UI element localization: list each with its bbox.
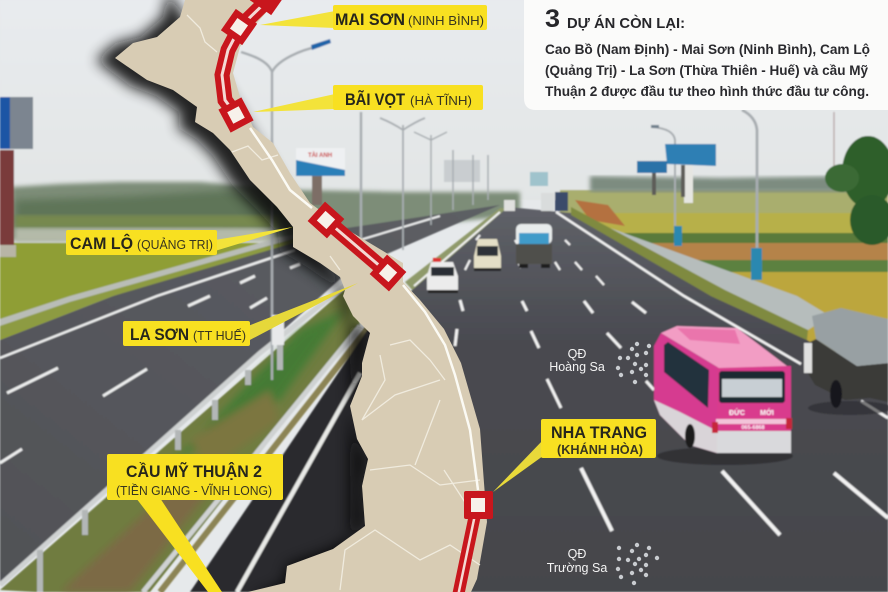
central median with vegetation <box>0 283 360 592</box>
label: Bãi Vọt: (HÀ TĨNH) <box>410 93 472 108</box>
panel body text <box>545 41 870 99</box>
dots: Trường Sa <box>616 543 659 585</box>
sky <box>0 0 888 200</box>
label: Cầu Mỹ Thuận 2: (TIỀN GIANG - VĨNH LONG) <box>116 483 272 498</box>
label: Bãi Vọt <box>253 85 483 112</box>
left carriageway <box>0 205 500 585</box>
white van <box>474 239 501 271</box>
light pole bases <box>674 226 762 280</box>
middle billboard <box>296 148 345 205</box>
left billboard <box>0 97 33 257</box>
provincial borders <box>187 15 480 590</box>
pink bus <box>654 326 793 465</box>
map shadow <box>96 0 370 592</box>
tree <box>825 136 888 245</box>
map of Vietnam <box>115 0 487 592</box>
label: Cầu Mỹ Thuận 2: CẦU MỸ THUẬN 2 <box>126 461 262 481</box>
panel heading <box>545 5 685 33</box>
centre carriageway <box>190 326 400 592</box>
national highway lines <box>250 128 478 490</box>
left road guardrail <box>0 233 300 326</box>
node: La Sơn <box>370 255 406 291</box>
node: Cam Lộ <box>308 202 344 238</box>
route: Cam Lộ to La Sơn <box>308 202 406 291</box>
label: Cam Lộ: (QUẢNG TRỊ) <box>137 237 213 252</box>
label: Trường Sa islands: QĐ <box>568 547 586 561</box>
node: Bãi Vọt <box>218 97 254 133</box>
label: Hoàng Sa islands: QĐ <box>568 347 586 361</box>
middle billboard: TÀI ANH <box>308 152 332 159</box>
label: La Sơn: LA SƠN <box>130 325 189 344</box>
node: Nha Trang <box>464 491 493 519</box>
tanker truck <box>516 224 552 268</box>
distant traffic <box>504 172 568 211</box>
label: Nha Trang: (KHÁNH HÒA) <box>557 442 643 457</box>
left road markings <box>0 216 440 463</box>
label: Cam Lộ <box>66 227 293 255</box>
panel heading: DỰ ÁN CÒN LẠI: <box>567 14 685 32</box>
label: Trường Sa islands <box>547 543 659 585</box>
panel body text: (Quảng Trị) - La Sơn (Thừa Thiên - Huế) và cầu Mỹ <box>545 62 868 78</box>
dots: Hoàng Sa <box>616 342 651 384</box>
street lights <box>241 46 834 380</box>
panel body text: Cao Bồ (Nam Định) - Mai Sơn (Ninh Bình), Cam Lộ <box>545 41 870 57</box>
node: Mai Sơn <box>221 9 257 45</box>
label: Nha Trang: NHA TRANG <box>551 423 647 442</box>
label: Mai Sơn: (NINH BÌNH) <box>408 13 484 28</box>
panel heading: 3 <box>545 5 560 33</box>
label: La Sơn: (TT HUẾ) <box>193 328 246 343</box>
right blue signs <box>637 144 716 203</box>
label: Bãi Vọt: BÃI VỌT <box>345 89 406 109</box>
label: Cầu Mỹ Thuận 2 <box>107 454 283 592</box>
label: La Sơn <box>123 283 358 346</box>
label: Nha Trang <box>493 419 656 492</box>
right roadside strip and guardrail <box>571 207 808 340</box>
label: Trường Sa islands: Trường Sa <box>547 561 607 575</box>
pink bus: ĐỨC <box>729 408 745 417</box>
panel: 3 remaining projects <box>524 0 888 110</box>
label: Mai Sơn <box>260 5 487 30</box>
right fields <box>560 176 888 352</box>
label: Hoàng Sa islands <box>549 342 651 384</box>
left fields <box>0 182 520 340</box>
panel body text: Thuận 2 được đầu tư theo hình thức đầu tư công. <box>545 83 869 99</box>
right carriageway <box>400 207 888 592</box>
median guardrails <box>0 280 360 592</box>
label: Cam Lộ: CAM LỘ <box>70 234 133 253</box>
route: Nha Trang southward <box>458 491 493 592</box>
far median strip <box>405 208 510 292</box>
node: top cut-off <box>250 0 286 15</box>
label: Mai Sơn: MAI SƠN <box>335 10 405 29</box>
right road markings <box>414 212 888 535</box>
route: Cao Bồ to Bãi Vọt <box>218 0 286 133</box>
pink bus: MỚI <box>760 408 774 417</box>
ambulance <box>427 258 458 293</box>
label: Hoàng Sa islands: Hoàng Sa <box>549 360 605 374</box>
distant buildings <box>444 160 480 182</box>
covered truck <box>804 308 888 415</box>
pink bus: 065-6868 <box>741 425 765 431</box>
